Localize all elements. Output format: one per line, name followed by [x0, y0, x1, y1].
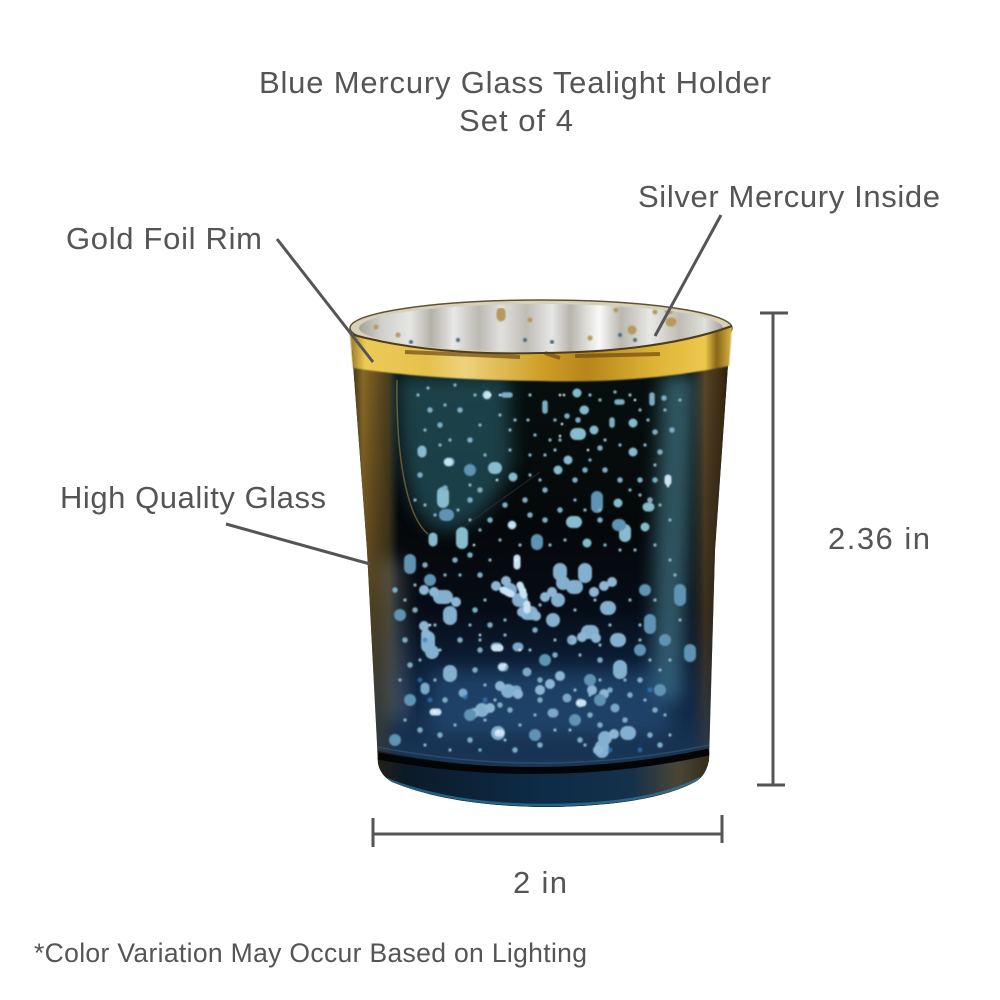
height dimension — [757, 313, 930, 785]
title: Blue Mercury Glass Tealight Holder — [259, 65, 771, 100]
glass body — [340, 350, 740, 820]
callout: silver mercury inside: Silver Mercury Inside — [638, 179, 940, 214]
callout: high quality glass: High Quality Glass — [60, 480, 326, 515]
glass tealight holder photo illustration — [340, 300, 740, 820]
callout: silver mercury inside — [638, 179, 940, 336]
height dimension: 2.36 in — [828, 521, 930, 556]
hairline crack — [463, 472, 540, 527]
width dimension: 2 in — [513, 865, 567, 900]
title: Set of 4 — [459, 103, 573, 138]
rim and mercury interior — [350, 300, 732, 356]
width dimension — [373, 815, 722, 900]
callout: gold foil rim: Gold Foil Rim — [66, 221, 262, 256]
mercury speckles — [395, 385, 690, 751]
title — [259, 65, 771, 138]
callout: gold foil rim — [66, 221, 373, 362]
glass base — [377, 750, 710, 807]
callout: high quality glass — [60, 480, 370, 564]
gold foil rim — [350, 326, 732, 381]
footnote: *Color Variation May Occur Based on Lighting — [34, 938, 587, 968]
